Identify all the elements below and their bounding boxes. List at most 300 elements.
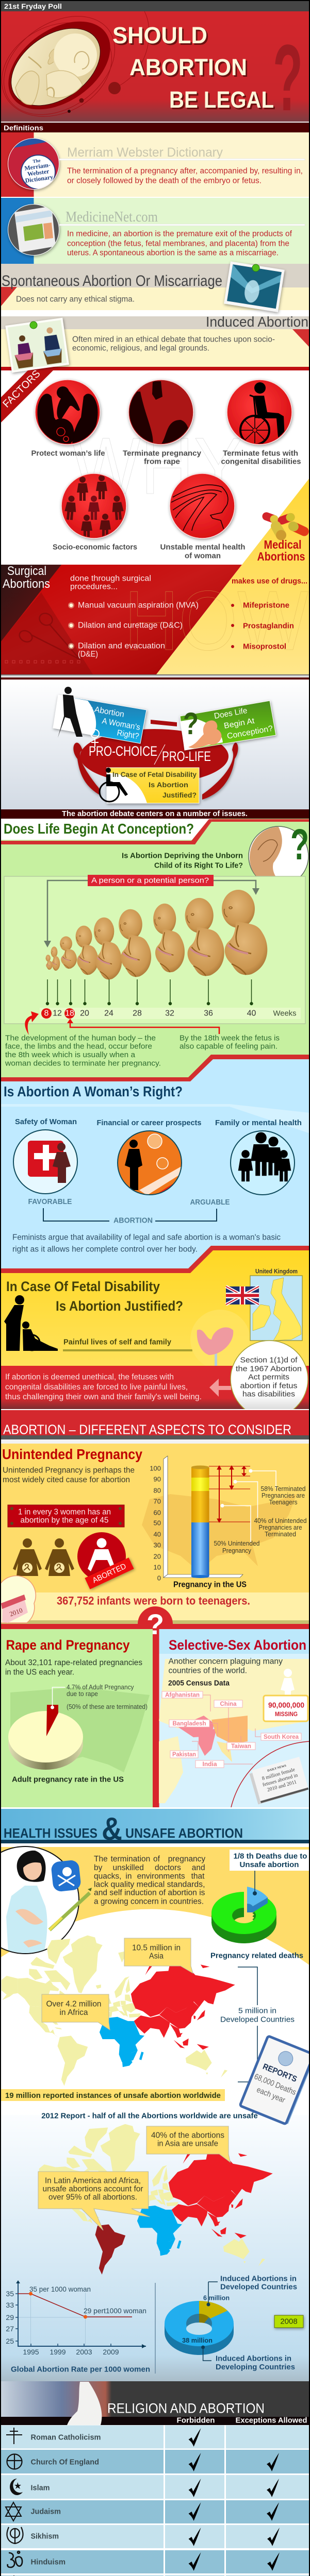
icon: skull danger [51,1859,81,1892]
caption bar: The abortion debate centers on a number of issues. [62,810,248,818]
chart: global abortion rate line: 25 [6,2337,14,2345]
week labels: 40 [247,1009,256,1018]
pie notes: due to rape [67,1690,98,1698]
red oval and arcs [73,720,238,800]
world map: reported unsafe abortions [2,1936,235,2086]
icon: newspaper: DAILY NEWS [267,1764,287,1773]
pro-choice / pro-life label: PRO-LIFE [162,749,211,764]
favorable / arguable bracket: ARGUABLE [190,1198,230,1207]
icon: pregnant woman two [45,1538,74,1576]
source title: Merriam Webster Dictionary [67,145,223,160]
red divider with question mark [0,1606,310,1807]
unethical note band [0,1366,310,1409]
week labels: 12 [53,1009,62,1018]
icon: website screen [5,201,62,258]
chart: global abortion rate line: 1995 [23,2348,39,2356]
country labels: Pakistan [172,1751,196,1758]
heading: Is Abortion Justified? [56,1298,183,1314]
section banner: health issues and unsafe abortion: HEALTH ISSUES [4,1825,97,1841]
arrow: development to week 8 [25,1011,39,1035]
factor labels: from rape [144,457,180,466]
chart: pregnancy related deaths donut [211,1871,276,1943]
callout: Latin America and Africa: over 95% of all abortions. [48,2193,137,2202]
callout: 1967 Abortion Act: Act permits [248,1372,289,1382]
heading: medical abortions [257,538,305,563]
reason labels: Family or mental health [215,1119,302,1127]
hero banner [0,0,310,135]
question text [122,851,243,870]
section banner: health issues and unsafe abortion [0,1807,310,1847]
favorable / arguable bracket: ABORTION [113,1216,153,1225]
heading: surgical abortions: Abortions [3,577,50,591]
unethical note band: congenital disabilities are forced to live painful lives, [5,1383,188,1392]
surgical side background [0,565,242,674]
icon: pills [261,511,310,542]
icon: star of David [6,2502,21,2521]
callout: 40% Asia: in Asia are unsafe [157,2139,218,2148]
panel: rape and pregnancy: Adult pregnancy rate in the US [12,1775,124,1784]
UK map [250,1267,302,1341]
callout: Africa 4.2 million [42,1994,110,2030]
label: deaths due to unsafe abortion: 1/8 th Deaths due to [233,1853,307,1861]
callout: Africa 4.2 million: in Africa [60,2008,88,2017]
definition text [67,167,303,185]
icon: newspaper: 8 million female [262,1767,296,1782]
chart notes [214,1485,307,1554]
WHY watermark: WHY [71,421,243,511]
icon: socio-economic people [61,473,126,539]
feminist argument text [12,1233,281,1254]
panel: spontaneous abortion [0,261,310,312]
card: life at conception [180,701,276,750]
card: woman's right: Is Abortion [86,704,125,719]
person label with arrows [44,875,259,947]
UK map: United Kingdom [255,1267,298,1275]
unsafe abortion text: pregnancy [168,1855,205,1863]
chart: induced abortions donut: Induced Abortions in [216,2354,291,2363]
pie notes: 4.7% of Adult Pregnancy [67,1684,134,1691]
icon: terminate pregnancy from rape [126,380,193,448]
religion names: Hinduism [31,2557,66,2567]
religion names: Roman Catholicism [31,2433,101,2442]
pro-choice / pro-life label: PRO-CHOICE [89,743,157,759]
chart: global abortion rate line [6,2280,150,2374]
unsafe abortion text: that [191,1872,205,1880]
hero orbit lines [0,0,149,135]
panel: surgical and medical abortions [0,478,310,674]
week labels: 28 [133,1009,142,1018]
icon: newspaper: 2010 and 2011 [267,1779,297,1793]
surgical procedures list: Manual vacuum aspiration (MVA) [78,601,199,610]
religion names: Islam [31,2483,50,2493]
panel: unsafe abortion [0,1846,310,2115]
icon: safety of woman [13,1130,77,1194]
callout: 90,000,000 missing: 90,000,000 [268,1701,304,1709]
favorable / arguable bracket: FAVORABLE [28,1198,72,1206]
panel: does life begin at conception [0,819,310,1081]
label: deaths due to unsafe abortion [230,1850,309,1871]
icon: syringe [50,1888,92,1930]
surgical procedures list: procedures... [70,582,118,591]
ribbon: factors: FACTORS [1,368,43,410]
heading: Unintended Pregnancy [2,1446,142,1462]
medical drugs list: Misoprostol [243,642,286,651]
chart: global abortion rate line: 35 [6,2290,14,2298]
country labels: Bangladesh [172,1720,206,1727]
intro text: most widely cited cause for abortion [3,1476,130,1484]
card: fetal disability [100,768,199,803]
icon: forceps [18,611,80,659]
panel: debate diagram [0,680,310,809]
definitions heading bar: Definitions [4,124,43,132]
unsafe abortion text: in [125,1872,132,1880]
factor labels: Unstable mental health [160,543,246,551]
title: BE LEGAL [171,88,275,114]
band: infants born to teenagers: 367,752 infants were born to teenagers. [57,1594,250,1607]
unsafe abortion text: doctors [155,1863,181,1872]
card: woman's right: Right? [116,728,140,741]
feminist argument text: right as it allows her complete control over her body. [12,1245,198,1254]
red divider with question mark: ? [146,1608,164,1640]
heading: surgical abortions: Surgical [7,564,46,578]
callout: Asia 10.5 million [124,1938,193,1973]
callout: Asia 10.5 million: 10.5 million in [132,1943,181,1953]
icon: 2010 calendar: 2010 [8,1606,24,1618]
icon: missing woman [281,1669,295,1700]
panel: selective-sex abortion: countries of the world. [168,1666,247,1675]
callout: 1967 Abortion Act: has disabilities [242,1390,295,1398]
corner arc [231,1741,309,1807]
icon: fetus on stick [190,1310,250,1369]
factor labels: Terminate pregnancy [123,449,202,457]
factor labels: congenital disabilities [221,457,301,466]
week labels [41,1008,296,1019]
week labels: 18 [65,1009,74,1018]
chart: adult pregnancy pie [8,1687,83,1770]
icon: newspaper [249,1757,309,1804]
fetuses by week [45,890,267,979]
fetus medallion illustration [0,4,126,127]
unsafe abortion text: environments [137,1872,185,1880]
chart notes: 40% of Unintended [254,1517,307,1524]
chart notes: Terminated [265,1531,296,1538]
chart: pregnancy in the US: 90 [154,1476,161,1483]
chart: pregnancy in the US: 100 [150,1464,161,1472]
panel: rape and pregnancy: Rape and Pregnancy [6,1637,130,1653]
definition text: The termination of a pregnancy after, accompanied by, resulting in, [67,167,303,175]
religion names [31,2433,101,2576]
religion names: Church Of England [31,2458,99,2467]
illustration: dove [67,2382,102,2425]
range lines and arrows [209,1466,250,1522]
medical drugs list: makes use of drugs... [232,577,307,585]
title: SHOULD [114,24,209,50]
badge: 2008: 2008 [280,2317,298,2326]
country labels: South Korea [264,1733,299,1740]
week ticks [46,979,253,1005]
icon: UN report [240,2035,310,2125]
panel: 2012 report maps and charts: 2012 Report - half of all the Abortions worldwide are unsafe [41,2112,258,2121]
caption bar [0,809,310,819]
title: ABORTION [131,56,249,82]
factor labels: Terminate fetus with [223,449,298,457]
icon: aborted [77,1532,134,1589]
chart: induced abortions donut [165,2274,297,2371]
medical side background [156,478,309,674]
panel: Merriam Webster definition [0,130,310,197]
icon: protect woman's life [35,380,100,448]
chart: pregnancy in the US: 40 [154,1530,161,1538]
icon: wheelchair [227,380,292,445]
week labels: Weeks [273,1009,296,1018]
country labels: India [202,1760,217,1768]
development text: face, the limbs and the head, occur before [5,1042,152,1051]
source title: MedicineNet.com [66,209,158,225]
panel: selective-sex abortion: 2005 Census Data [168,1679,230,1688]
section banner: different aspects [0,1409,310,1444]
icon: dictionary: Merriam- [24,161,51,172]
heading: surgical abortions [3,564,50,591]
reason labels: Financial or career prospects [97,1119,201,1127]
icon: Church of England [7,2454,22,2469]
unsafe abortion text: and self induction of abortion is [94,1889,205,1897]
card: life at conception: ? [183,706,199,741]
panel: rape and pregnancy: in the US each year. [5,1668,74,1676]
factor labels: Socio-economic factors [53,543,137,551]
callout: Latin America and Africa [38,2172,150,2230]
table: religion and abortion [0,2426,310,2576]
definition text: conception (the fetus, fetal membranes, and placenta) from the [67,239,289,248]
chart: global abortion rate line: Global Abortion Rate per 1000 women [11,2365,150,2374]
top bar: poll label [0,0,310,11]
section banner: religion and abortion: Exceptions Allowed [235,2416,307,2425]
check marks: exceptions column [267,2453,280,2571]
panel: spontaneous abortion: Spontaneous Abortion Or Miscarriage [2,273,222,290]
person label with arrows: A person or a potential person? [91,876,209,885]
panel: spontaneous abortion: Does not carry any ethical stigma. [16,295,135,304]
callout: 40% Asia [146,2126,230,2162]
plaque: one in three: 1 in every 3 women has an [18,1507,111,1517]
panel: selective-sex abortion [159,1629,309,1807]
development text: woman decides to terminate her pregnancy. [5,1059,161,1067]
surgical procedures list [68,574,199,658]
icon: UN report: REPORTS [262,2062,298,2084]
painful lives note [63,1337,192,1351]
unsafe abortion text: termination [111,1855,150,1863]
icon: unstable mental health [170,473,235,538]
heading ribbon: Does Life Begin At Conception? [4,821,194,837]
unsafe abortion text: The [94,1855,108,1863]
panel: unintended pregnancy [0,1444,310,1624]
icon: Jain hand [9,2575,21,2576]
icon: dictionary [6,137,62,193]
chart: pregnancy in the US: 80 [154,1487,161,1494]
unsafe abortion text: a growing concern in countries. [94,1897,204,1906]
icon: crescent and star [10,2479,23,2495]
chart: pregnancy in the US: 60 [154,1509,161,1517]
callout: 1967 Abortion Act: the 1967 Abortion [236,1364,302,1374]
callout: 90,000,000 missing: MISSING [275,1710,298,1718]
feeling pain text [180,1033,280,1051]
surgical procedures list: Dilation and curettage (D&C) [78,621,183,630]
icon: dictionary: Webster [27,167,50,178]
panel: MedicineNet definition [0,197,310,264]
callout: 1967 Abortion Act: abortion if fetus [240,1382,297,1390]
photo: debate [5,318,69,372]
label: 19 million reported: 19 million reported instances of unsafe abortion worldwide [5,2091,221,2100]
card: woman's right [53,687,146,747]
factor labels: Protect woman’s life [31,449,105,457]
world map: 2012 report [39,2124,273,2275]
definition text: uterus. A spontaneous abortion is the same as a miscarriage. [67,248,279,258]
band: infants born to teenagers [0,1592,310,1624]
bracket: developed countries [220,1967,295,2082]
unsafe abortion text: unskilled [112,1863,144,1872]
chart: pregnancy in the US: 0 [157,1574,161,1582]
card: fetal disability: In Case of Fetal Disability [112,770,197,778]
arrow: week 18 pain [67,1019,219,1034]
card: life at conception: Begin At [223,717,255,731]
panel: selective-sex abortion: Another concern plaguing many [168,1657,283,1666]
icon: UN report: 68,000 Deaths [253,2072,298,2097]
heading: medical abortions: Medical [264,538,301,551]
bracket: developed countries: Developed Countries [220,2015,295,2024]
icon: pregnant woman one [13,1538,42,1576]
unsafe abortion text [94,1855,205,1906]
chart: pregnancy in the US: 50 [154,1519,161,1527]
title [112,22,275,114]
panel: unsafe abortion: Pregnancy related deaths [210,1952,303,1960]
chart notes: 50% Unintended [214,1540,260,1547]
religion names: Judaism [31,2507,61,2516]
chart notes: Pregnancy [222,1547,252,1554]
panel: rape and pregnancy: About 32,101 rape-related pregnancies [5,1658,142,1667]
country labels [162,1691,301,1768]
panel: induced abortion: Often mired in an ethical debate that touches upon socio- [72,335,275,344]
icon: family [231,1131,295,1195]
chart notes: Teenagers [269,1499,297,1506]
unsafe abortion text: lack quality medical standards, [94,1880,205,1889]
icon: UK flag [226,1286,259,1304]
background US map [142,1494,297,1571]
reason labels: Safety of Woman [15,1118,77,1126]
callout: Asia 10.5 million: Asia [149,1952,164,1961]
country labels: Afghanistan [165,1691,200,1698]
plaque: one in three: abortion by the age of 45 [21,1516,108,1525]
card: fetal disability: Justified? [162,791,197,799]
chart notes: Pregnancies are [259,1524,302,1531]
red stripe [0,1055,310,1081]
title: ABORTION [129,54,247,80]
card: life at conception: Does Life [214,706,248,721]
icon: newspaper: fetuses aborted in [262,1772,299,1788]
chart: pregnancy in the US [150,1456,307,1589]
question text: Is Abortion Depriving the Unborn [122,851,243,860]
definitions heading bar [0,122,310,132]
heading ribbon [0,819,310,844]
icon: 2010 calendar [0,1576,36,1623]
card: life at conception: Conception? [226,724,274,741]
development text [5,1033,161,1067]
divider band [0,674,310,680]
icon: fetus in womb [249,820,309,886]
chart: global abortion rate line: 1999 [50,2348,66,2356]
chart notes: Pregnancies are [262,1492,305,1499]
panel: rape and pregnancy [0,1629,153,1807]
chart: global abortion rate line: 2003 [76,2348,92,2356]
development text: The development of the human body – the [5,1033,156,1043]
week labels: 20 [80,1009,89,1018]
panel: induced abortion: economic, religious, and legal grounds. [72,344,209,352]
unsafe abortion text: quacks, [94,1872,121,1880]
intro text [3,1466,135,1484]
top bar: poll label: 21st Fryday Poll [4,2,62,10]
callout: Latin America and Africa: In Latin America and Africa, [45,2176,141,2185]
feeling pain text: also capable of feeling pain. [180,1042,278,1051]
panel: factors [1,368,301,561]
map of Asia [159,1659,309,1803]
country labels: Taiwan [231,1742,251,1750]
callout: 40% Asia: 40% of the abortions [151,2131,224,2140]
callout: Latin America and Africa: unsafe abortions account for [42,2184,143,2194]
chart: global abortion rate line: 29 pert1000 woman [84,2307,146,2315]
chart: pregnancy in the US: 10 [154,1563,161,1571]
chart: induced abortions donut: 6 million [203,2294,230,2302]
pro-choice / pro-life label [89,743,211,765]
illustration: pregnant woman [0,1846,79,1954]
callout: 1967 Abortion Act [231,1341,308,1418]
intro text: Unintended Pregnancy is perhaps the [3,1466,135,1475]
icon: dictionary: The [32,158,41,164]
chart: global abortion rate line: 27 [6,2325,14,2333]
leader lines [222,1471,276,1542]
icon: wheelchair silhouette [4,1295,58,1351]
section banner: religion and abortion [0,2381,310,2425]
unethical note band: thus challenging their own and their family's well being. [5,1393,202,1401]
country labels: China [220,1700,237,1707]
callout: 1967 Abortion Act: Section 1(1)d of [240,1356,298,1364]
red stripe [0,1246,310,1273]
panel: 2012 report maps and charts [0,2035,310,2382]
week labels: 32 [165,1009,174,1018]
card: woman's right: A Woman’s [101,717,141,732]
heading: Is Abortion A Woman’s Right? [4,1083,183,1099]
icon: aborted: ABORTED [91,1562,127,1585]
icon: UN report: each year [255,2086,286,2105]
unsafe abortion text: and [192,1863,205,1872]
title: BE LEGAL [169,87,274,113]
photo: ultrasound hand [224,261,285,312]
development text: the 8th week which is usually when a [5,1050,136,1059]
icon: Catholic cross [6,2428,22,2444]
section banner: religion and abortion: RELIGION AND ABORTION [107,2401,265,2416]
label: deaths due to unsafe abortion: Unsafe abortion [239,1861,299,1869]
plaque: one in three [8,1505,124,1527]
heading [6,1279,183,1314]
panel: induced abortion [0,314,310,372]
stacked cylinder [191,1465,209,1578]
icon: wheelchair symbol [100,768,128,802]
chart: global abortion rate line: 2009 [103,2348,119,2356]
feminist argument text: Feminists argue that availability of legal and safe abortion is a woman's basic [12,1233,281,1242]
chart: global abortion rate line: 29 [6,2313,14,2321]
definition text: or closely followed by the death of the embryo or fetus. [67,176,262,185]
chart: pregnancy in the US: 70 [154,1497,161,1505]
week labels: 36 [204,1009,213,1018]
week labels: 8 [44,1009,49,1018]
unethical note band: If abortion is deemed unethical, the fetuses with [5,1372,174,1382]
panel: fetal development timeline [4,875,305,1024]
